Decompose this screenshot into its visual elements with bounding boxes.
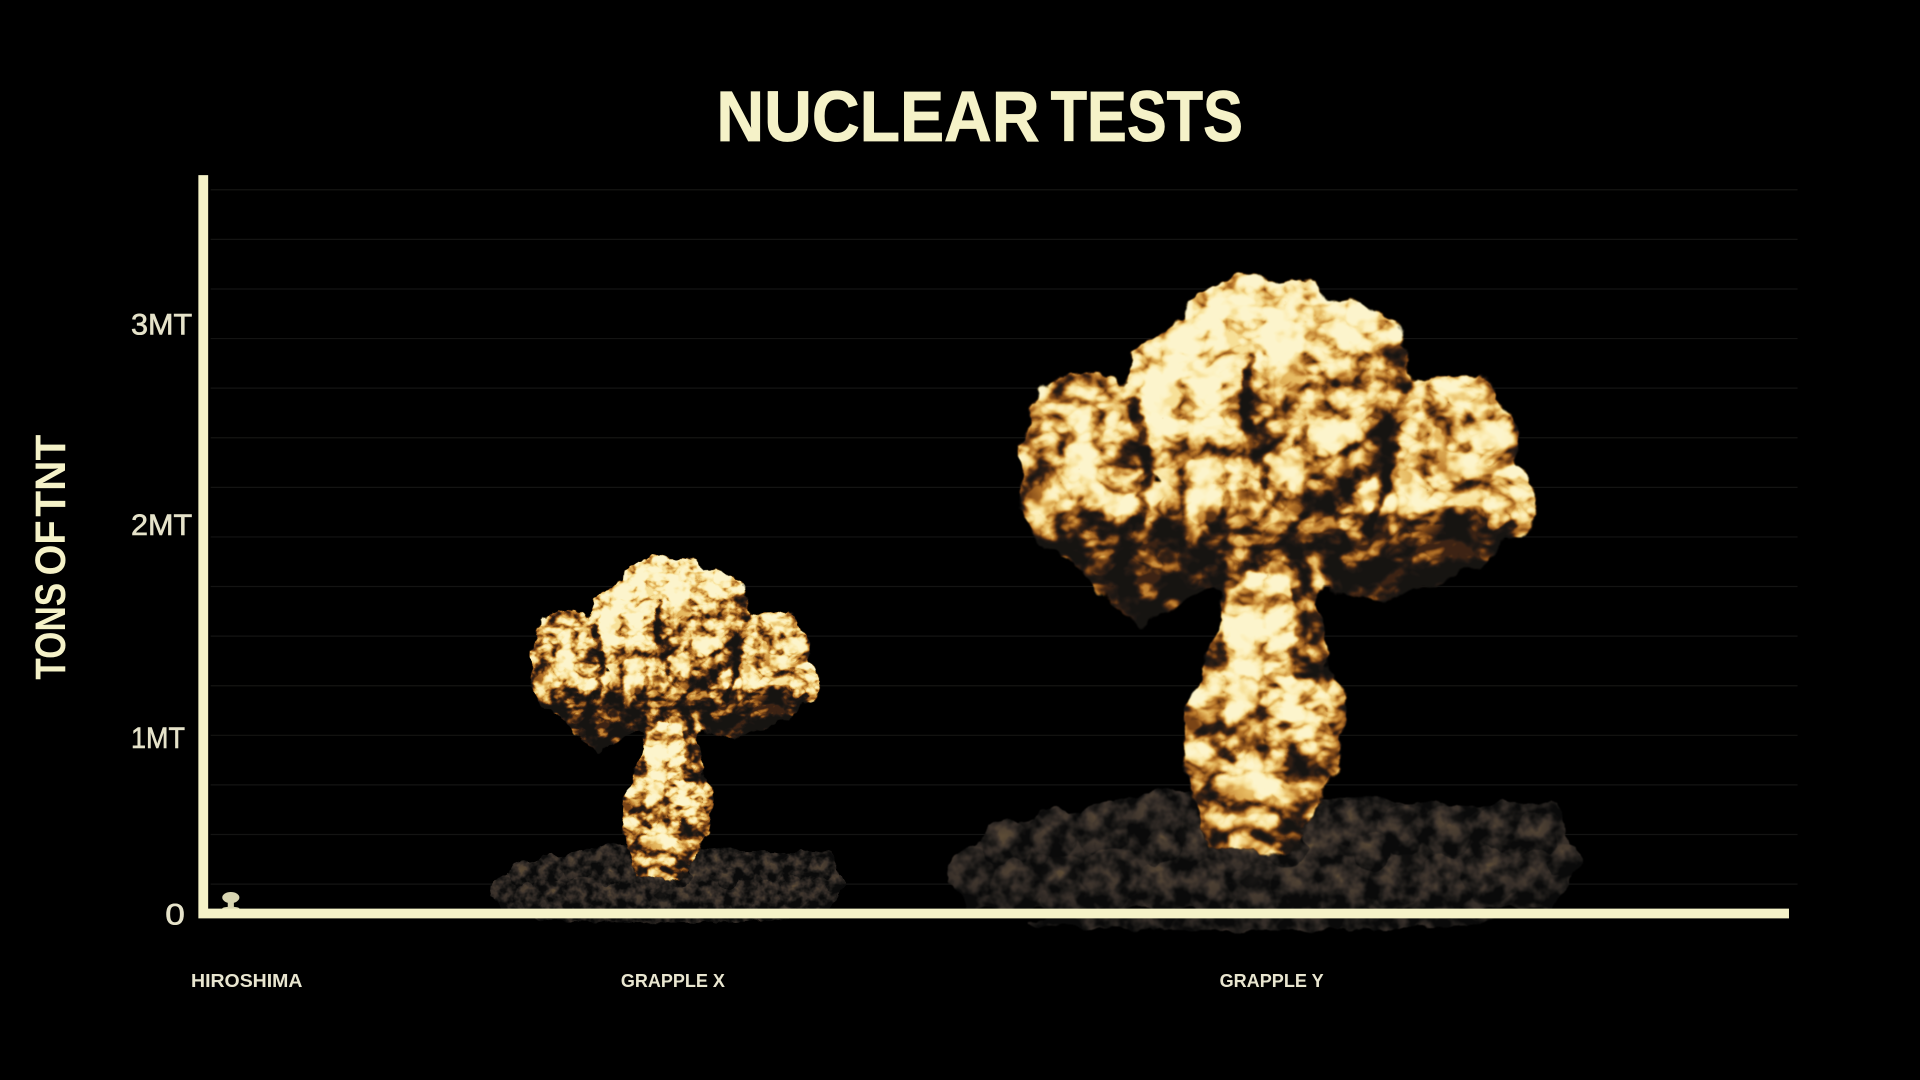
y axis title bbox=[27, 435, 75, 680]
category label: Grapple X: GRAPPLE X bbox=[621, 970, 726, 991]
y axis title: TONS bbox=[27, 583, 75, 680]
mushroom cloud: Grapple Y bbox=[948, 277, 1583, 931]
y axis title: OF bbox=[27, 520, 75, 576]
y axis tick labels bbox=[131, 308, 192, 931]
y axis tick labels: 1MT bbox=[131, 722, 185, 755]
y axis tick labels: 2MT bbox=[131, 509, 192, 542]
y axis tick labels: 0 bbox=[165, 898, 185, 931]
chart axes bbox=[198, 175, 1789, 918]
title: NUCLEAR bbox=[716, 78, 1040, 157]
icon: Hiroshima mushroom cloud bbox=[222, 892, 239, 910]
grid lines bbox=[211, 190, 1798, 884]
title bbox=[716, 78, 1243, 157]
mushroom cloud: Grapple X bbox=[490, 557, 846, 923]
y axis tick labels: 3MT bbox=[131, 308, 192, 341]
category label: Grapple Y: GRAPPLE Y bbox=[1220, 970, 1324, 991]
y axis title: TNT bbox=[27, 435, 75, 517]
category label: Hiroshima: HIROSHIMA bbox=[191, 970, 302, 991]
title: TESTS bbox=[1051, 78, 1243, 157]
